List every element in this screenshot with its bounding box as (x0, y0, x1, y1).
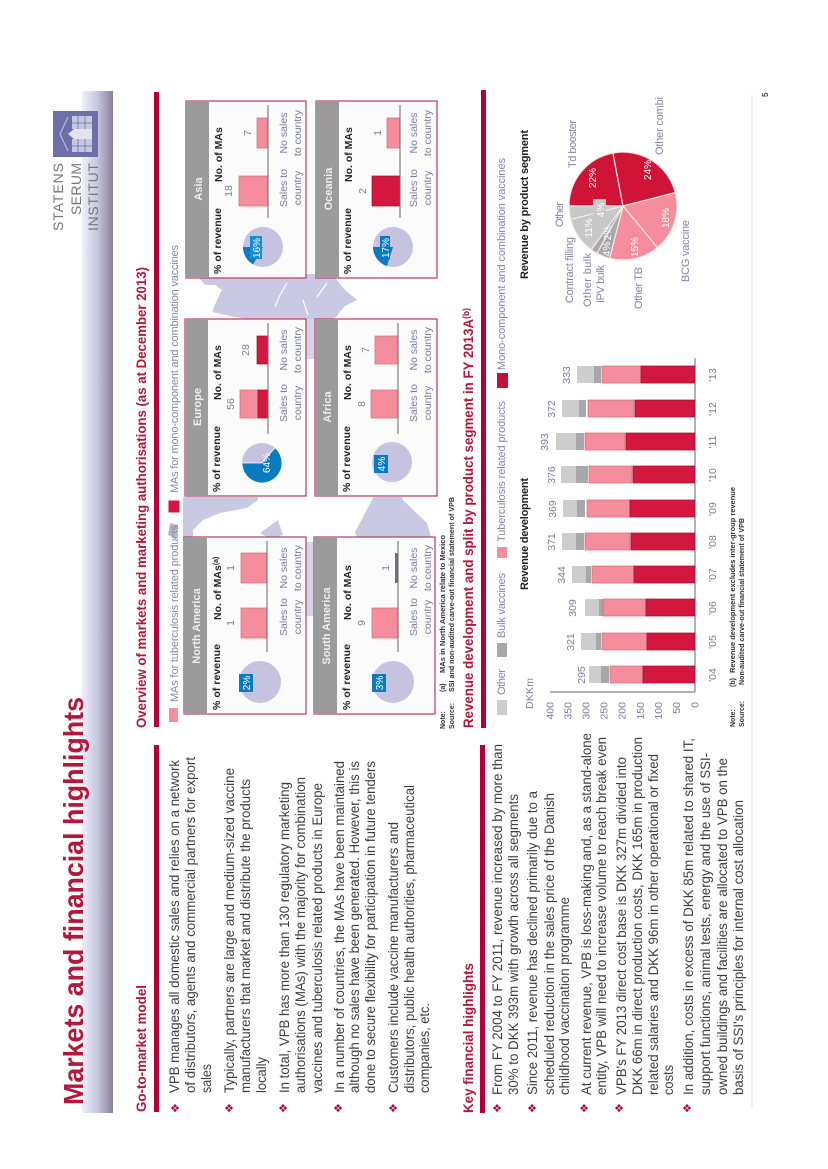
note: markets panel: (a) (440, 683, 447, 692)
legend: market authorisations: MAs for tuberculosis related products (169, 524, 181, 702)
text block: go-to-market bullets: although no sales have been generated. However, this is (346, 761, 362, 1093)
panel: Europe: Sales to (278, 384, 290, 422)
text block: key financial highlights bullets (489, 733, 746, 1113)
logo: Statens Serum Institut (50, 111, 101, 231)
panel: Africa: 7 (360, 347, 372, 353)
panel: South America: 3% (375, 676, 386, 690)
panel: Africa: No. of MAs (342, 345, 354, 400)
panel: Africa: 4% (377, 457, 388, 471)
pie chart: revenue by product segment: Td booster (567, 120, 579, 168)
text block: key financial highlights bullets: DKK 66m in direct production costs, DKK 165m in production (629, 737, 645, 1095)
note: revenue chart: Source: (739, 701, 746, 727)
panel: Oceania: 17% (381, 238, 392, 258)
panel: South America: South America (321, 587, 333, 665)
note: revenue chart: Revenue development excludes inter-group revenue (730, 487, 737, 673)
logo: Statens Serum Institut: INSTITUT (85, 163, 101, 231)
panel: North America: Sales to (278, 598, 290, 636)
panel: Oceania: No sales (408, 113, 420, 153)
pie chart: revenue by product segment (519, 97, 692, 309)
panel: Europe: No. of MAs (212, 345, 224, 400)
heading: Revenue development and split: Revenue development and split by product segment in FY 2013A (460, 297, 476, 728)
text block: key financial highlights bullets: 30% to DKK 393m with growth across all segments (505, 794, 521, 1095)
panel: Oceania: country (422, 170, 434, 205)
panel: Europe (185, 319, 306, 496)
text block: key financial highlights bullets: entity, VPB will need to increase volume to reach break even (593, 737, 609, 1095)
panel: Oceania: 1 (372, 130, 384, 136)
text block: go-to-market bullets: locally (253, 1057, 269, 1093)
panel: Africa: to country (422, 326, 434, 373)
panel: North America: 1 (225, 565, 237, 571)
text block: go-to-market bullets: VPB manages all domestic sales and relies on a network (166, 759, 182, 1093)
panel: Europe: 64% (262, 453, 273, 473)
bar chart: revenue development (519, 358, 719, 720)
bar: 2009 (547, 500, 719, 518)
panel: North America: to country (292, 544, 304, 591)
panel: North America: 1 (225, 620, 237, 626)
bar chart: revenue development: 0 (690, 702, 702, 708)
panel: North America: % of revenue (211, 644, 223, 710)
panel: North America (184, 537, 306, 714)
panel: Africa: Sales to (408, 384, 420, 422)
text block: key financial highlights bullets: childhood vaccination programme (556, 897, 572, 1095)
panel: Africa: country (422, 385, 434, 420)
panel: Europe: 56 (225, 398, 237, 410)
text block: go-to-market bullets: sales (198, 1064, 214, 1093)
bar: 2010: 376 (546, 466, 558, 484)
panel: Asia: No sales (278, 113, 290, 153)
page number: 5 (761, 92, 770, 97)
bar chart: revenue development: Revenue development (519, 478, 531, 590)
panel: Oceania: Sales to (408, 169, 420, 207)
panel: South America (314, 537, 435, 714)
bar: 2010 (546, 466, 719, 484)
bar: 2012: '12 (707, 402, 719, 416)
text block: key financial highlights bullets: scheduled reduction in the sales price of the Danish (541, 793, 557, 1095)
heading: Go-to-market model: Go-to-market model (133, 985, 149, 1112)
pie chart: revenue by product segment: 18% (661, 208, 672, 228)
text block: key financial highlights bullets: At current revenue, VPB is loss-making and, as a stand-alone (578, 733, 594, 1095)
pie chart: revenue by product segment: 4% (602, 242, 613, 256)
panel: Asia: Asia (193, 177, 205, 201)
text block: key financial highlights bullets: basis of SSI's principles for internal cost allocation (730, 800, 746, 1095)
bar: 2013: 333 (561, 366, 573, 384)
legend: revenue segments: Tuberculosis related products (496, 400, 508, 542)
world map background (168, 231, 432, 616)
text block: go-to-market bullets: companies, etc. (416, 1003, 432, 1093)
bar: 2012: 372 (546, 400, 558, 418)
pie chart: revenue by product segment: 15% (630, 237, 641, 257)
text block: go-to-market bullets: ❖ (277, 1103, 290, 1113)
text block: key financial highlights bullets: ❖ (526, 1103, 539, 1113)
note: revenue chart: Note: (730, 709, 737, 727)
panel: South America: 9 (356, 620, 368, 626)
bar: 2004: '04 (707, 668, 719, 682)
panel: Asia: % of revenue (212, 208, 224, 274)
bar: 2007: '07 (707, 568, 719, 582)
panel: Africa: 8 (356, 401, 368, 407)
pie chart: revenue by product segment: 22% (588, 168, 599, 188)
panel: North America: North America (191, 587, 203, 664)
bar: 2006: 309 (567, 599, 579, 617)
panel: Oceania: 2 (357, 188, 369, 194)
bar: 2004 (576, 666, 719, 684)
panel: Europe: No sales (278, 330, 290, 370)
bar: 2009: '09 (707, 502, 719, 516)
bar: 2007 (556, 566, 719, 584)
bar chart: revenue development: 400 (544, 702, 556, 720)
logo: Statens Serum Institut: STATENS (50, 163, 66, 231)
panel: Asia (186, 101, 306, 278)
bar chart: revenue development: 50 (671, 702, 683, 714)
panel: South America: % of revenue (341, 644, 353, 710)
text block: key financial highlights bullets: VPB's FY 2013 direct cost base is DKK 327m divided into (613, 757, 629, 1095)
text block: key financial highlights bullets: support functions, animal tests, energy and the use of SSI- (697, 753, 713, 1095)
panel: South America: 1 (380, 565, 392, 571)
text block: go-to-market bullets: ❖ (169, 1103, 182, 1113)
bar: 2004: 295 (576, 666, 588, 684)
bar: 2011: '11 (707, 435, 719, 448)
panel: Oceania (316, 101, 437, 278)
bar chart: revenue development: 150 (635, 702, 647, 720)
panel: Europe: country (292, 385, 304, 420)
panel: Oceania: No. of MAs (343, 127, 355, 182)
legend: revenue segments: Mono-component and combination vaccines (496, 158, 508, 370)
text block: go-to-market bullets: In total, VPB has more than 130 regulatory marketing (276, 782, 292, 1093)
bar: 2005: '05 (707, 635, 719, 649)
pie chart: revenue by product segment: 2% (603, 226, 614, 240)
panel: Africa: No sales (408, 330, 420, 370)
bar chart: revenue development: 100 (653, 702, 665, 720)
pie chart: revenue by product segment: 24% (643, 160, 654, 180)
pie chart: revenue by product segment: Other combi (654, 97, 666, 155)
heading: Overview of markets: Overview of markets and marketing authorisations (as at December 2013) (133, 267, 149, 728)
bar chart: revenue development: 200 (616, 702, 628, 720)
panel: Asia: to country (292, 109, 304, 156)
bar chart: revenue development: 250 (598, 702, 610, 720)
heading: Revenue development and split: (b) (461, 308, 471, 319)
bar: 2005 (565, 633, 719, 651)
panel: Africa (315, 319, 437, 496)
panel: Oceania: Oceania (323, 167, 335, 210)
note: revenue chart: Non-audited carve-out financial statement of VPB (739, 518, 746, 685)
bar: 2006: '06 (707, 601, 719, 615)
pie chart: revenue by product segment: IPV bulk (595, 264, 607, 303)
panel: Africa: Africa (322, 391, 334, 423)
note: revenue chart: (b) (730, 678, 737, 687)
panel: Asia: country (292, 170, 304, 205)
bar: 2010: '10 (707, 468, 719, 482)
bar: 2013 (561, 366, 719, 384)
bar: 2005: 321 (565, 633, 577, 651)
bar: 2009: 369 (547, 500, 559, 518)
pie chart: revenue by product segment: 4% (596, 203, 607, 217)
panel: South America: to country (422, 544, 434, 591)
pie chart: revenue by product segment: Contract filling (564, 237, 576, 303)
text block: go-to-market bullets (166, 757, 432, 1113)
panel: Asia: 16% (252, 238, 263, 258)
text block: go-to-market bullets: Typically, partners are large and medium-sized vaccine (221, 768, 237, 1093)
text block: key financial highlights bullets: In addition, costs in excess of DKK 85m related to shared IT, (680, 738, 696, 1095)
bar: 2011 (539, 433, 719, 451)
panel: Europe: % of revenue (211, 426, 223, 492)
note: markets panel: MAs in North America relate to Mexico (440, 535, 447, 673)
panel: North America: 2% (242, 676, 253, 690)
text block: go-to-market bullets: manufacturers that market and distribute the products (237, 779, 253, 1093)
bar: 2007: 344 (556, 566, 568, 584)
legend: market authorisations: MAs for mono-component and combination vaccines (169, 244, 181, 493)
text block: go-to-market bullets: done to secure flexibility for participation in future tenders (362, 761, 378, 1093)
legend: market authorisations (168, 244, 181, 722)
panel: Europe: 28 (240, 344, 252, 356)
text block: key financial highlights bullets: ❖ (491, 1103, 504, 1113)
bar: 2013: '13 (707, 368, 719, 382)
panel: North America: No sales (278, 548, 290, 588)
pie chart: revenue by product segment: BCG vaccine (680, 220, 692, 282)
text block: go-to-market bullets: Customers include vaccine manufacturers and (385, 822, 401, 1093)
text block: key financial highlights bullets: related salaries and DKK 96m in other operational or fixed (645, 754, 661, 1095)
title: Markets and financial highlights (58, 697, 89, 1105)
legend: revenue segments (496, 158, 508, 715)
text block: key financial highlights bullets: costs (660, 1065, 676, 1095)
bar: 2006 (567, 599, 719, 617)
panel: Europe: Europe (192, 388, 204, 426)
panel: South America: country (422, 599, 434, 634)
text block: go-to-market bullets: ❖ (387, 1103, 400, 1113)
bar: 2008: 371 (546, 533, 558, 551)
text block: go-to-market bullets: distributors, public health authorities, pharmaceutical (401, 785, 417, 1093)
panel: Asia: Sales to (278, 169, 290, 207)
pie chart: revenue by product segment: Other (554, 202, 566, 227)
panel: North America: No. of MAs (212, 565, 224, 620)
bar: 2008 (546, 533, 719, 551)
panel: North America: (a) (213, 557, 220, 565)
logo: Statens Serum Institut: SERUM (68, 163, 84, 215)
panel: South America: No. of MAs (342, 565, 354, 620)
note: markets panel (440, 497, 456, 729)
text block: go-to-market bullets: ❖ (332, 1103, 345, 1113)
note: markets panel: SSI and non-audited carve-out financial statement of VPB (449, 497, 456, 692)
panel: Oceania: % of revenue (342, 208, 354, 274)
text block: key financial highlights bullets: ❖ (681, 1103, 694, 1113)
panel: Africa: % of revenue (341, 426, 353, 492)
note: markets panel: Note: (440, 711, 447, 729)
text block: go-to-market bullets: ❖ (223, 1103, 236, 1113)
bar: 2012 (546, 400, 719, 418)
panel: Oceania: to country (422, 109, 434, 156)
legend: revenue segments: Other (496, 669, 508, 695)
panel: South America: No sales (408, 548, 420, 588)
text block: go-to-market bullets: vaccines and tuberculosis related products in Europe (309, 783, 325, 1093)
text block: go-to-market bullets: In a number of countries, the MAs have been maintained (331, 761, 347, 1093)
pie chart: revenue by product segment: Revenue by product segment (519, 130, 531, 279)
header gradient band (82, 91, 113, 1113)
panel: Asia: No. of MAs (213, 127, 225, 182)
pie chart: revenue by product segment: Other TB (633, 267, 645, 309)
panel: Asia: 18 (223, 185, 235, 197)
panel: North America: country (292, 599, 304, 634)
panel: South America: Sales to (408, 598, 420, 636)
bar chart: revenue development: DKKm (524, 678, 536, 709)
text block: key financial highlights bullets: ❖ (613, 1103, 626, 1113)
bar chart: revenue development: 300 (580, 702, 592, 720)
text block: key financial highlights bullets: Since 2011, revenue has declined primarily due to a (524, 791, 540, 1095)
bar: 2011: 393 (539, 433, 551, 451)
bar chart: revenue development: 350 (562, 702, 574, 720)
pie chart: revenue by product segment: 11% (584, 218, 595, 238)
text block: go-to-market bullets: of distributors, agents and commercial partners for export (182, 757, 198, 1093)
text block: key financial highlights bullets: From FY 2004 to FY 2011, revenue increased by more than (489, 744, 505, 1095)
note: revenue chart (730, 487, 746, 727)
pie chart: revenue by product segment: Other bulk (582, 252, 594, 307)
bar: 2008: '08 (707, 535, 719, 549)
text block: key financial highlights bullets: owned buildings and facilities are allocated to VPB on the (714, 758, 730, 1095)
panel: Europe: to country (292, 326, 304, 373)
panel: Asia: 7 (242, 130, 254, 136)
heading: Key financial highlights: Key financial highlights (460, 963, 476, 1113)
legend: revenue segments: Bulk vaccines (496, 572, 508, 638)
text block: key financial highlights bullets: ❖ (578, 1103, 591, 1113)
text block: go-to-market bullets: authorisations (MAs) with the majority for combination (292, 777, 308, 1093)
note: markets panel: Source: (449, 703, 456, 729)
